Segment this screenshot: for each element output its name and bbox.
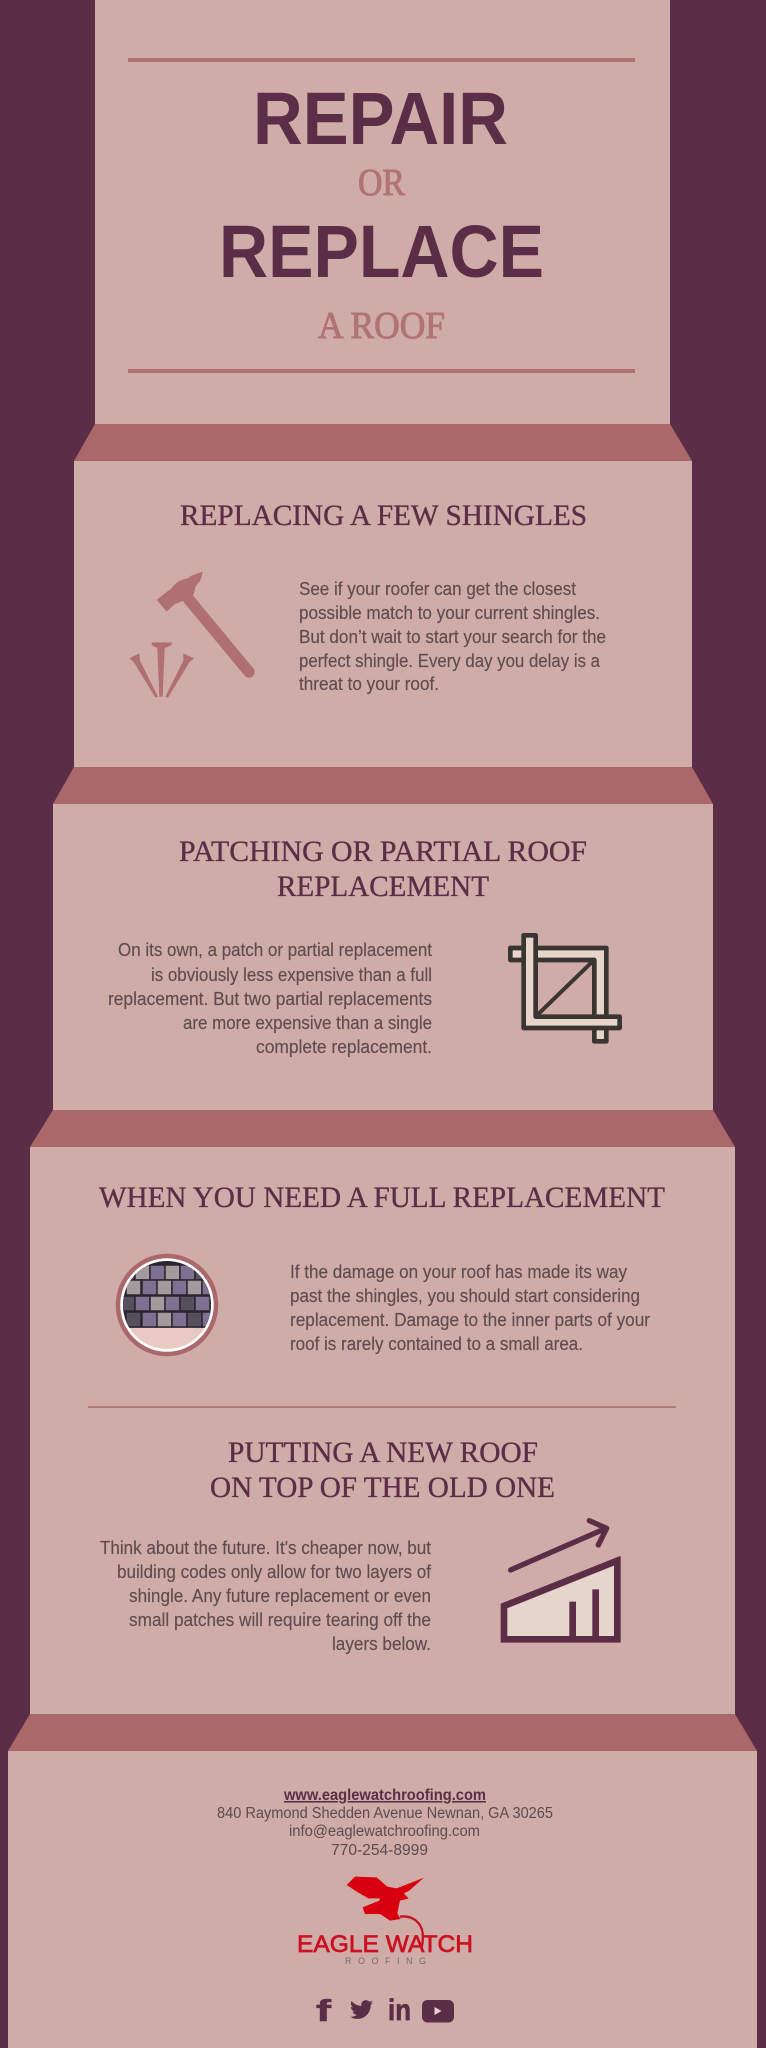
icon: hammer and nails [129, 572, 249, 698]
logo: Eagle Watch Roofing: EAGLE WATCH [297, 1931, 473, 1958]
text block: shingles: threat to your roof. [299, 674, 439, 694]
heading: patching: PATCHING OR PARTIAL ROOF [179, 835, 587, 868]
contact details: 770-254-8999 [331, 1842, 428, 1859]
social icons [316, 1993, 454, 2028]
step band 1 [74, 424, 692, 461]
panel: patching or partial roof replacement [53, 804, 713, 1110]
text block: patching: complete replacement. [256, 1037, 432, 1057]
panel: replacing a few shingles [74, 461, 692, 767]
text block: full replacement: If the damage on your roof has made its way [290, 1262, 627, 1282]
text block: patching [108, 940, 432, 1057]
title: A ROOF [318, 305, 445, 347]
step band 2 [53, 767, 713, 804]
text block: patching: is obviously less expensive than a full [151, 965, 432, 985]
text block: new roof on top: layers below. [332, 1634, 431, 1654]
heading: new roof on top: ON TOP OF THE OLD ONE [210, 1471, 555, 1504]
panel: full replacement and new roof on top [30, 1147, 735, 1714]
text block: new roof on top: Think about the future. It's cheaper now, but [100, 1538, 431, 1558]
icon: crop tool [510, 935, 620, 1041]
text block: shingles: perfect shingle. Every day you delay is a [299, 651, 601, 671]
text block: new roof on top: building codes only allow for two layers of [117, 1562, 432, 1582]
text block: patching: are more expensive than a single [183, 1013, 432, 1033]
text block: new roof on top [100, 1538, 432, 1654]
title [219, 77, 544, 347]
heading: new roof on top [210, 1436, 555, 1504]
heading: new roof on top: PUTTING A NEW ROOF [228, 1436, 538, 1469]
logo: Eagle Watch Roofing [297, 1877, 473, 1966]
text block: new roof on top: shingle. Any future replacement or even [129, 1586, 431, 1606]
contact details: www.eaglewatchroofing.com [283, 1787, 486, 1804]
text block: shingles: But don’t wait to start your search for the [299, 627, 606, 647]
icon: twitter [350, 2000, 373, 2019]
step band 4 [8, 1714, 757, 1751]
text block: shingles [299, 579, 606, 694]
contact details: 840 Raymond Shedden Avenue Newnan, GA 30265 [217, 1805, 553, 1822]
icon: facebook: f [316, 1993, 332, 2028]
icon: rising chart with arrow [504, 1521, 617, 1639]
text block: patching: On its own, a patch or partial replacement [118, 940, 432, 960]
text block: shingles: possible match to your current shingles. [299, 603, 600, 623]
heading: replacing a few shingles: REPLACING A FEW SHINGLES [180, 499, 587, 532]
title: REPLACE [219, 210, 544, 293]
panel: title [95, 0, 670, 424]
contact details [217, 1787, 553, 1859]
title: OR [358, 162, 406, 204]
panel: footer [8, 1751, 757, 2048]
icon: linkedin: in [388, 1994, 411, 2027]
step band 3 [30, 1110, 735, 1147]
text block: full replacement [290, 1262, 650, 1354]
text block: shingles: See if your roofer can get the closest [299, 579, 576, 599]
text block: patching: replacement. But two partial replacements [108, 989, 432, 1009]
logo: Eagle Watch Roofing: ROOFING [345, 1956, 426, 1966]
icon: youtube [422, 2000, 454, 2022]
title: REPAIR [253, 77, 508, 160]
text block: full replacement: replacement. Damage to the inner parts of your [290, 1310, 650, 1330]
heading: patching [179, 835, 587, 903]
text block: full replacement: past the shingles, you should start considering [290, 1286, 640, 1306]
icon: shingle circle [118, 1256, 217, 1354]
heading: full replacement: WHEN YOU NEED A FULL REPLACEMENT [99, 1181, 665, 1214]
contact details: info@eaglewatchroofing.com [289, 1823, 480, 1840]
text block: new roof on top: small patches will require tearing off the [129, 1610, 431, 1630]
text block: full replacement: roof is rarely contained to a small area. [290, 1334, 583, 1354]
heading: patching: REPLACEMENT [277, 870, 489, 903]
